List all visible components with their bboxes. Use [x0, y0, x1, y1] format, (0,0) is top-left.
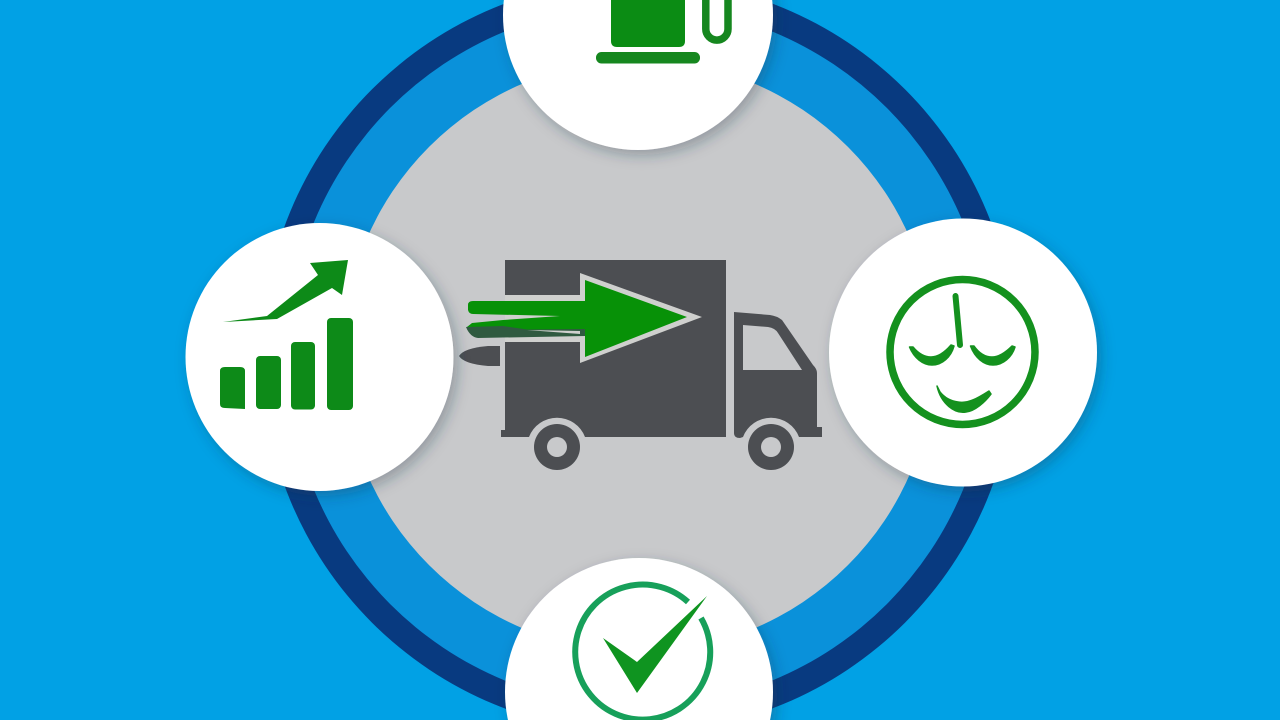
- rear wheel: [748, 424, 794, 470]
- icon: delivery truck: [459, 260, 822, 470]
- pump base: [596, 52, 700, 64]
- lower speed streak: [466, 324, 585, 338]
- left eye: [910, 345, 954, 365]
- icon: check mark: [575, 585, 710, 720]
- check ring: [575, 585, 710, 720]
- icon: growth chart: [220, 260, 353, 410]
- truck cab: [734, 312, 822, 438]
- nose line: [956, 296, 960, 345]
- truck window: [743, 325, 802, 370]
- arrow halo: [505, 273, 702, 363]
- rising arrow: [223, 260, 348, 322]
- front-left wheel: [534, 424, 580, 470]
- bar 4: [327, 318, 353, 410]
- bar 3: [291, 342, 315, 410]
- icon: calm face: [890, 280, 1035, 424]
- panel: top circle: [503, 0, 773, 150]
- panel: bottom circle: [505, 558, 773, 720]
- arrow body: [467, 280, 687, 357]
- right eye: [970, 346, 1015, 365]
- fuel hose: [706, 0, 728, 40]
- exhaust puff: [459, 346, 500, 366]
- streak highlight: [527, 330, 580, 334]
- bar 2: [256, 356, 281, 409]
- face outline: [890, 280, 1035, 424]
- icon: speed arrow: [466, 273, 702, 363]
- bar 1: [220, 367, 245, 409]
- check: [603, 596, 707, 693]
- central grey disc: [342, 60, 934, 652]
- truck cargo box: [501, 260, 726, 437]
- ring: outer navy and blue bands: [262, 0, 1016, 720]
- icon: fuel pump: [596, 0, 728, 64]
- smile: [937, 386, 991, 412]
- panel: left circle: [186, 223, 454, 491]
- pump body: [611, 0, 685, 47]
- panel: right circle: [829, 218, 1097, 486]
